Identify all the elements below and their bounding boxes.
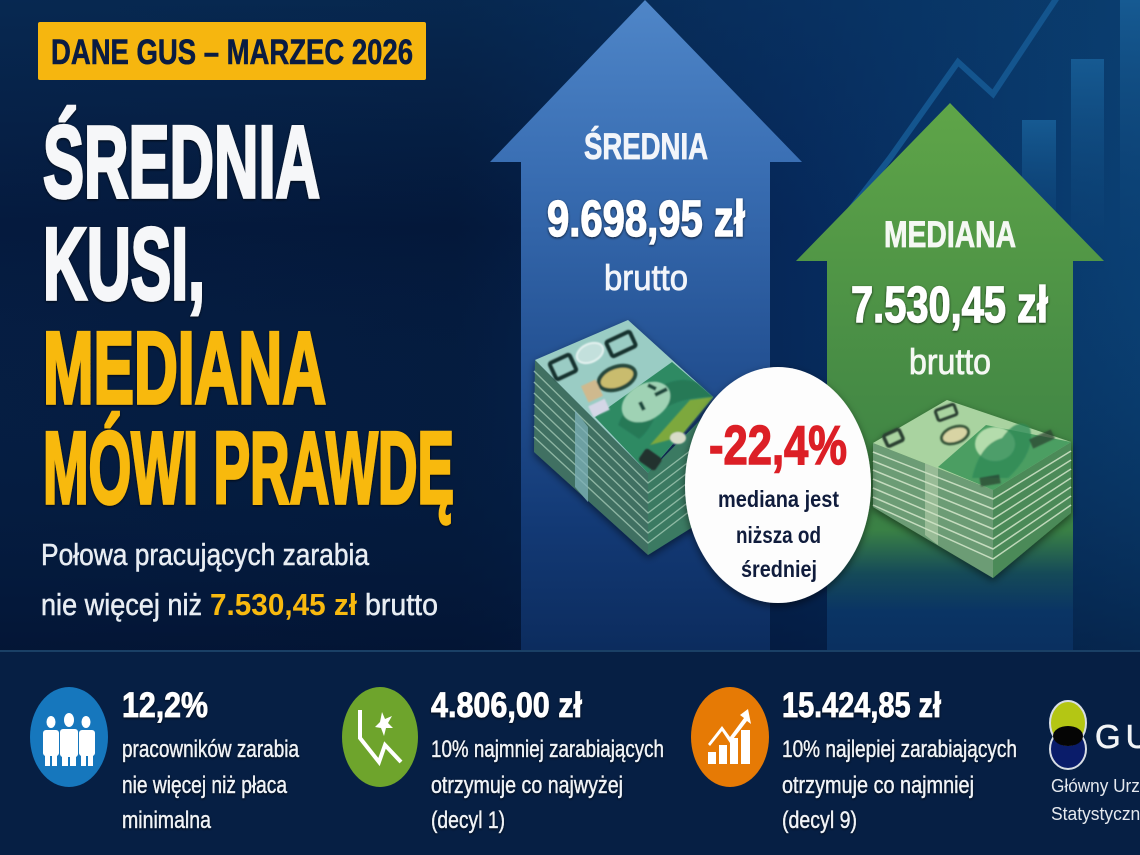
subtitle: nie więcej niż [41, 587, 202, 622]
stat description [431, 736, 664, 834]
stat value: 4.806,00 zł [431, 686, 582, 725]
stat description: (decyl 9) [782, 807, 857, 834]
unit: mediana: brutto [909, 341, 991, 382]
stat description [782, 736, 1017, 834]
title [43, 105, 454, 525]
title: MÓWI PRAWDĘ [43, 411, 454, 525]
stat description: pracowników zarabia [122, 736, 300, 763]
money stack: mediana [873, 400, 1071, 578]
callout text: średniej [741, 556, 817, 582]
stat description: 10% najmniej zarabiających [431, 736, 664, 763]
bottom band [0, 650, 1140, 855]
icon: people [30, 687, 108, 787]
value: mediana: 7.530,45 zł [851, 276, 1048, 333]
logo caption [1051, 776, 1140, 824]
unit: średnia: brutto [604, 257, 688, 298]
arrow: mediana [796, 103, 1104, 651]
subtitle: Połowa pracujących zarabia [41, 537, 370, 572]
stat value: 12,2% [122, 686, 208, 725]
background chart: bars and trend line [850, 0, 1140, 280]
stat description: otrzymuje co najmniej [782, 772, 974, 799]
label: mediana: MEDIANA [884, 214, 1016, 255]
header tag: DANE GUS – MARZEC 2026 [51, 33, 413, 72]
stat value: 15.424,85 zł [782, 686, 941, 725]
stat description: (decyl 1) [431, 807, 505, 834]
title: ŚREDNIA [43, 105, 320, 219]
stat description: nie więcej niż płaca [122, 772, 288, 799]
stat: decile 1 [342, 686, 664, 834]
logo: GUS [1050, 701, 1140, 824]
header tag [38, 22, 426, 80]
label: średnia: ŚREDNIA [584, 125, 708, 167]
callout: difference [685, 367, 871, 603]
stat: minimum wage [30, 686, 300, 834]
stat description: 10% najlepiej zarabiających [782, 736, 1017, 763]
value: średnia: 9.698,95 zł [547, 190, 745, 247]
arrow: średnia [490, 0, 802, 651]
callout text: niższa od [736, 522, 821, 548]
money stack: średnia [534, 320, 720, 555]
stat description: otrzymuje co najwyżej [431, 772, 623, 799]
callout value: -22,4% [709, 414, 847, 476]
stat description [122, 736, 300, 834]
subtitle [41, 537, 438, 622]
stat: decile 9 [691, 686, 1017, 834]
callout text [718, 486, 839, 582]
icon: falling line [342, 687, 418, 787]
logo mark [1050, 701, 1086, 769]
subtitle: 7.530,45 zł [210, 587, 357, 622]
title: MEDIANA [43, 311, 326, 425]
subtitle: brutto [365, 587, 438, 622]
stat description: minimalna [122, 807, 212, 834]
icon: rising chart [691, 687, 769, 787]
callout text: mediana jest [718, 486, 839, 512]
title: KUSI, [43, 207, 205, 321]
